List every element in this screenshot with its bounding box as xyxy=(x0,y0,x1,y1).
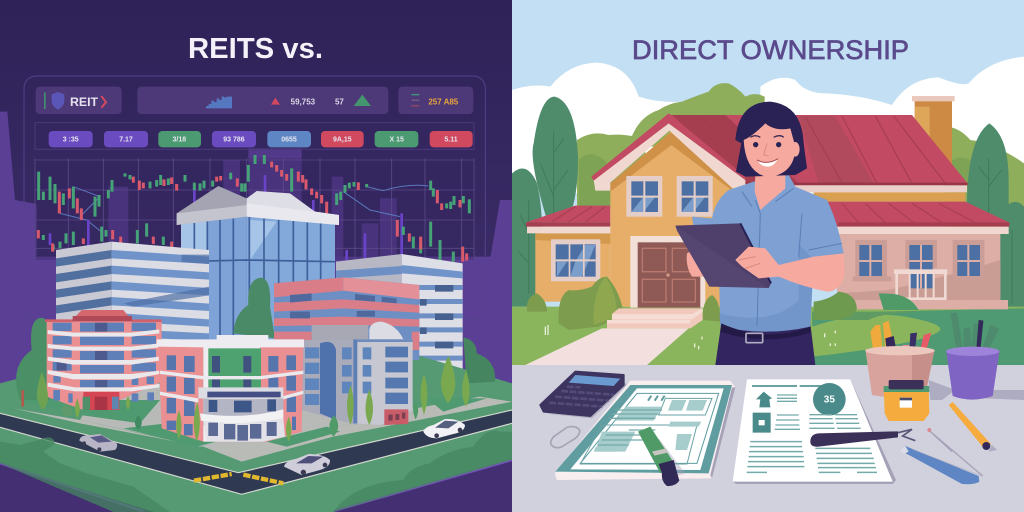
right striped tower xyxy=(336,254,463,369)
header box: REIT logo xyxy=(36,87,122,114)
right wing roof xyxy=(827,202,1009,227)
compass needle xyxy=(927,428,983,476)
dashboard: stock trading screen xyxy=(24,76,485,319)
title: DIRECT OWNERSHIP: DIRECT OWNERSHIP xyxy=(632,35,909,65)
panel: direct ownership (right half) xyxy=(512,0,1024,512)
header box: REIT logo: REIT xyxy=(70,95,99,109)
front gable wall xyxy=(591,113,745,308)
red-roof apartment building xyxy=(45,310,162,410)
tree behind pink building xyxy=(233,278,275,338)
grass tufts xyxy=(545,325,835,349)
row of price pills: 93 786 xyxy=(223,137,245,144)
panel: REITs (left half) xyxy=(0,0,512,512)
row of price pills: 9A,15 xyxy=(333,137,352,144)
car: silver centre xyxy=(284,454,330,475)
left wing window xyxy=(551,239,600,281)
paper clip xyxy=(551,427,580,448)
background hedges xyxy=(577,83,1024,227)
main red roof xyxy=(669,115,968,185)
header box: index value xyxy=(398,87,473,114)
front steps and path xyxy=(525,308,703,365)
shirt xyxy=(692,175,844,332)
header box: index value: 257 A85 xyxy=(428,97,459,106)
gable trim xyxy=(594,123,745,191)
sidewalk and block xyxy=(13,383,512,462)
candlestick chart xyxy=(35,155,474,262)
neck xyxy=(755,173,785,210)
pink office block xyxy=(274,277,419,360)
left wing of house xyxy=(526,206,610,302)
car: white right xyxy=(423,419,465,438)
trousers xyxy=(715,323,815,365)
cars on the road xyxy=(79,419,465,475)
right arm and hand xyxy=(735,247,845,292)
porch railing xyxy=(894,269,947,301)
front door xyxy=(630,236,705,308)
left hand xyxy=(687,251,709,277)
face xyxy=(744,123,795,177)
upper windows xyxy=(626,176,713,217)
bushes near right wing xyxy=(814,292,919,320)
clouds xyxy=(512,57,1024,193)
purple cup with pens xyxy=(929,313,1024,400)
yellow pencil xyxy=(949,402,997,452)
person holding tablet xyxy=(675,102,845,365)
chimney xyxy=(912,96,955,167)
right document xyxy=(733,379,896,484)
roof fascia and band xyxy=(795,185,967,202)
calculator xyxy=(540,372,627,418)
header box: market ticker: 57 xyxy=(335,97,344,106)
right wing of house xyxy=(827,202,1009,309)
car: silver left xyxy=(79,434,117,452)
sticky tape box xyxy=(884,380,929,421)
row of price pills: X 15 xyxy=(389,137,404,144)
pencil cup xyxy=(865,321,935,397)
header box: market ticker xyxy=(137,87,388,114)
belt xyxy=(720,323,810,343)
shrubs by the door xyxy=(527,277,720,330)
suburban house scene xyxy=(512,57,1024,365)
tall trees xyxy=(512,97,1024,308)
eyes and smile xyxy=(750,136,784,167)
blue pen xyxy=(899,446,982,484)
row of price pills: 5.11 xyxy=(444,137,458,144)
title: REITS vs.: REITS vs. xyxy=(188,33,323,65)
glass headquarters tower xyxy=(176,186,339,340)
right wing windows xyxy=(853,240,989,288)
central pink and green building xyxy=(157,335,304,442)
row of price pills: 3/18 xyxy=(173,137,186,144)
hair back xyxy=(735,102,807,177)
row of price pills: 3 :35 xyxy=(63,137,79,144)
row of price pills: 7.17 xyxy=(119,137,133,144)
header box: market ticker: 59,753 xyxy=(291,97,316,106)
row of price pills: 0655 xyxy=(281,137,297,144)
background: purple city skyline xyxy=(0,112,512,393)
tall striped office tower xyxy=(56,242,209,350)
road intersection xyxy=(0,410,512,494)
green highlighter xyxy=(638,427,685,486)
gray apartment building xyxy=(302,322,413,425)
right document: 35 xyxy=(824,395,835,406)
row of price pills xyxy=(49,131,473,147)
glass tower roof xyxy=(177,186,339,225)
left document in teal folder xyxy=(555,381,735,480)
tablet xyxy=(675,223,771,288)
bushes in the foreground xyxy=(0,431,512,512)
street trees behind red building xyxy=(16,318,495,407)
desk with paperwork xyxy=(512,313,1024,512)
dark pen xyxy=(810,429,915,447)
ground: city block and roads xyxy=(0,277,512,512)
small street trees xyxy=(37,356,470,442)
lawn xyxy=(512,307,1024,365)
